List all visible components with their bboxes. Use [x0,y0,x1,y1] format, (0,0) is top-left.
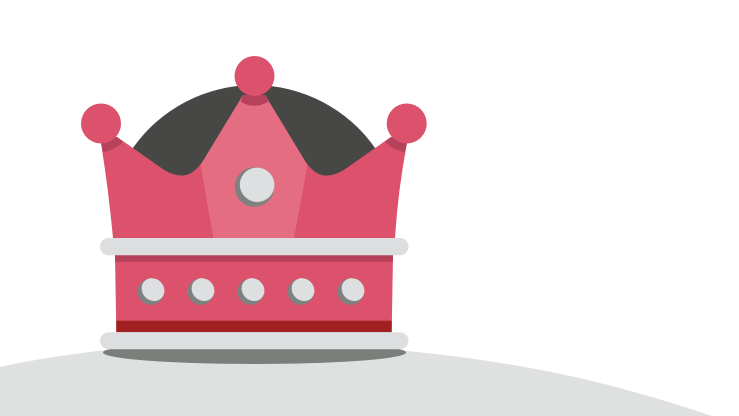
lower body top shadow [115,255,393,262]
shadow under right ball [385,137,407,152]
upper grey band [100,238,408,255]
gem 1 [137,273,169,306]
gem 4 [287,273,319,306]
gem 3 [237,273,269,306]
lower grey band [100,332,408,349]
gem 2 [187,273,219,306]
crown lower body [115,255,393,332]
shadow under left ball [101,137,123,152]
top ball [234,56,274,96]
lower body red stripe [116,321,392,332]
left ball [81,104,121,144]
crown dark inner cap [133,85,375,180]
centre gem [235,167,275,207]
gem row [137,273,369,306]
gem 5 [337,273,369,306]
shadow under top ball [241,95,268,106]
crown upper body [101,95,407,238]
right ball [387,104,427,144]
ground hill [0,343,712,416]
crown centre panel [200,95,308,238]
crown shadow [103,341,406,364]
